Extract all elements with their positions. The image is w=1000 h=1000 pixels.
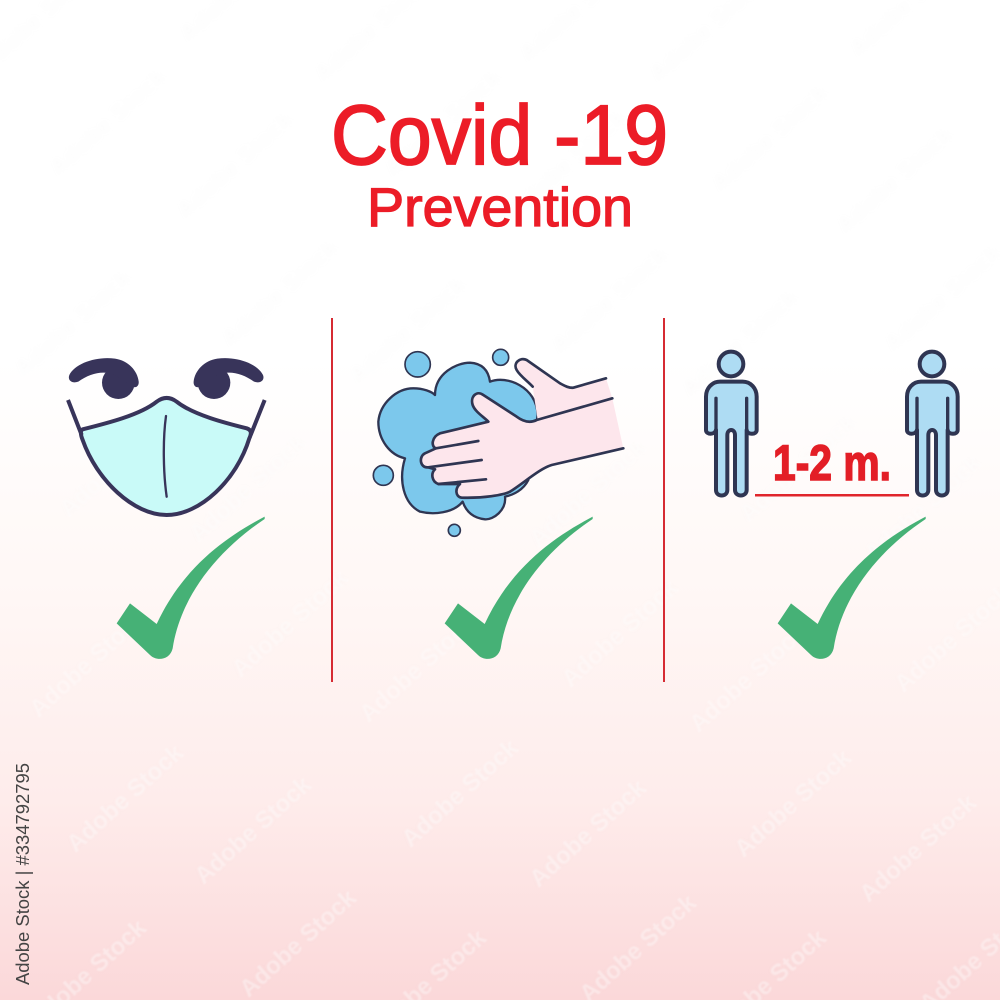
icon: soap bubbles — [373, 349, 509, 536]
divider right — [663, 318, 665, 682]
panel: social distancing — [706, 352, 958, 496]
watermark pattern: Adobe Stock — [9, 264, 137, 383]
checkmark 2 — [445, 517, 593, 659]
icon: right person — [907, 352, 958, 495]
watermark pattern: Adobe Stock — [854, 789, 982, 908]
watermark pattern: Adobe Stock — [859, 449, 987, 568]
title — [331, 88, 668, 238]
watermark pattern: Adobe Stock — [706, 79, 834, 198]
watermark pattern: Adobe Stock — [546, 241, 674, 360]
watermark pattern: Adobe Stock — [184, 429, 312, 548]
icon: left eye — [69, 358, 139, 399]
watermark pattern: Adobe Stock — [729, 744, 857, 863]
icon: foam — [378, 363, 538, 519]
watermark pattern: Adobe Stock — [524, 774, 652, 893]
watermark pattern: Adobe Stock — [556, 574, 684, 693]
watermark pattern: Adobe Stock — [344, 271, 472, 390]
watermark pattern: Adobe Stock — [379, 64, 507, 183]
watermark pattern: Adobe Stock — [226, 564, 354, 683]
watermark pattern: Adobe Stock — [234, 884, 362, 1000]
watermark pattern: Adobe Stock — [396, 734, 524, 853]
watermark pattern: Adobe Stock — [171, 106, 299, 225]
watermark pattern: Adobe Stock — [734, 409, 862, 528]
watermark pattern: Adobe Stock — [61, 739, 189, 858]
icon: mask — [68, 398, 265, 515]
icon: back hand — [516, 359, 612, 420]
panel: hand washing — [373, 349, 623, 536]
heading: Prevention: Prevention — [367, 176, 633, 238]
watermark pattern: Adobe Stock — [354, 609, 482, 728]
distance line — [755, 494, 909, 496]
watermark pattern: Adobe Stock — [24, 604, 152, 723]
heading: Covid -19: Covid -19 — [331, 88, 668, 182]
watermark pattern: Adobe Stock — [504, 104, 632, 223]
icon: front hand — [421, 393, 623, 498]
watermark pattern: Adobe Stock — [676, 284, 804, 403]
icon: left person — [706, 352, 757, 495]
vertical stock caption: Adobe Stock | #334792795 — [13, 763, 33, 985]
divider left — [331, 318, 333, 682]
watermark pattern: Adobe Stock — [399, 399, 527, 518]
watermark pattern: Adobe Stock — [44, 63, 172, 182]
watermark pattern: Adobe Stock — [54, 404, 182, 523]
checkmark 3 — [778, 517, 926, 659]
panel: face mask — [68, 358, 265, 515]
watermark pattern: Adobe Stock — [684, 619, 812, 738]
distance label: 1-2 m. — [773, 435, 891, 491]
watermark pattern: Adobe Stock — [189, 771, 317, 890]
watermark pattern: Adobe Stock — [216, 234, 344, 353]
watermark pattern: Adobe Stock — [831, 121, 959, 240]
watermark pattern: Adobe Stock — [524, 434, 652, 553]
icon: right eye — [194, 358, 263, 399]
checkmark 1 — [117, 517, 265, 659]
